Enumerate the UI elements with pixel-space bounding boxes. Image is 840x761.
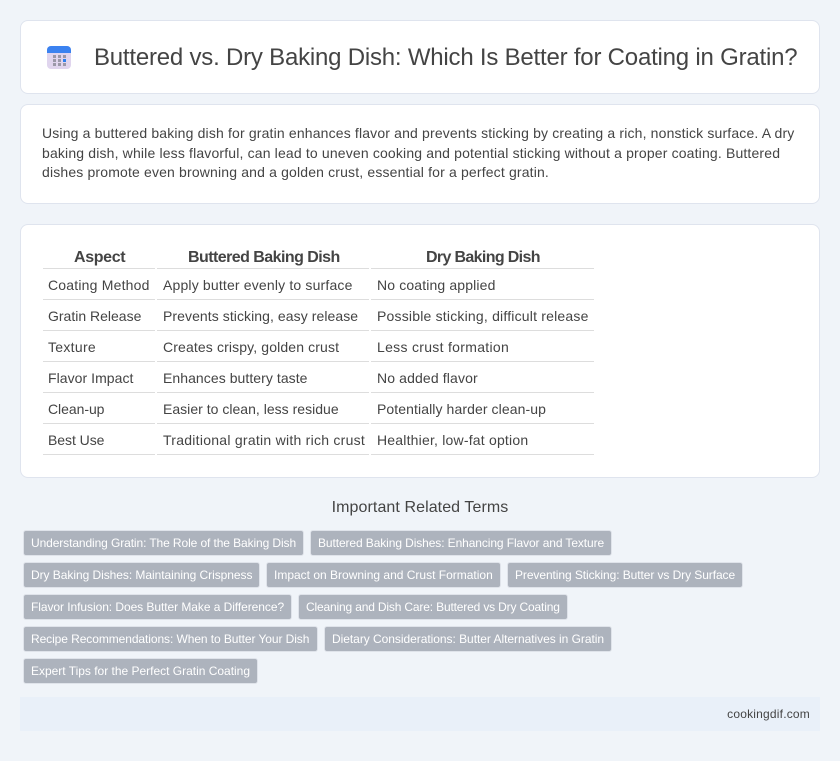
icon: calendar dish [47, 46, 71, 69]
text: Enhances buttery taste [163, 370, 308, 386]
text: Less crust formation [377, 339, 509, 355]
table heading: Buttered Baking Dish: Buttered Baking Dish [188, 249, 340, 266]
summary text: baking dish, while less flavorful, can lead to uneven cooking and potential sticking without a proper coating. Buttered [42, 145, 780, 161]
text: Gratin Release [48, 308, 141, 324]
summary card [20, 104, 820, 204]
text: Prevents sticking, easy release [163, 308, 358, 324]
related terms tags: Cleaning and Dish Care: Buttered vs Dry Coating [306, 600, 560, 614]
table heading: Dry Baking Dish: Dry Baking Dish [426, 249, 540, 266]
table row: Coating Method: Coating Method [48, 277, 150, 293]
summary text: Using a buttered baking dish for gratin enhances flavor and prevents sticking by creating a rich, nonstick surface. A dry [42, 125, 794, 141]
related terms tags [23, 530, 743, 684]
summary text: dishes promote even browning and a golden crust, essential for a perfect gratin. [42, 164, 549, 180]
text: Easier to clean, less residue [163, 401, 339, 417]
related terms tags: Buttered Baking Dishes: Enhancing Flavor and Texture [318, 536, 604, 550]
header card [20, 20, 820, 94]
related terms tags: Dry Baking Dishes: Maintaining Crispness [31, 568, 252, 582]
related terms heading: Important Related Terms [332, 499, 508, 516]
footer source: cookingdif.com [727, 707, 810, 721]
text: Clean-up [48, 401, 104, 417]
related terms tags: Recipe Recommendations: When to Butter Your Dish [31, 632, 309, 646]
text: Apply butter evenly to surface [163, 277, 353, 293]
text: Best Use [48, 432, 104, 448]
summary text [42, 125, 794, 180]
text: Creates crispy, golden crust [163, 339, 339, 355]
related terms tags: Impact on Browning and Crust Formation [274, 568, 493, 582]
text: Possible sticking, difficult release [377, 308, 589, 324]
related terms tags: Understanding Gratin: The Role of the Baking Dish [31, 536, 296, 550]
text: Texture [48, 339, 96, 355]
related terms tags: Dietary Considerations: Butter Alternatives in Gratin [332, 632, 604, 646]
comparison table [43, 268, 594, 455]
text: Healthier, low-fat option [377, 432, 528, 448]
text: Flavor Impact [48, 370, 133, 386]
text: No coating applied [377, 277, 496, 293]
related terms tags: Flavor Infusion: Does Butter Make a Difference? [31, 600, 284, 614]
related terms tags: Expert Tips for the Perfect Gratin Coating [31, 664, 250, 678]
table heading: Aspect: Aspect [74, 249, 125, 266]
text: Traditional gratin with rich crust [163, 432, 365, 448]
text: No added flavor [377, 370, 478, 386]
footer bar [20, 697, 820, 731]
related terms tags: Preventing Sticking: Butter vs Dry Surface [515, 568, 735, 582]
comparison table card [20, 224, 820, 478]
title: Buttered vs. Dry Baking Dish: Which Is Better for Coating in Gratin? [94, 44, 797, 71]
text: Potentially harder clean-up [377, 401, 546, 417]
